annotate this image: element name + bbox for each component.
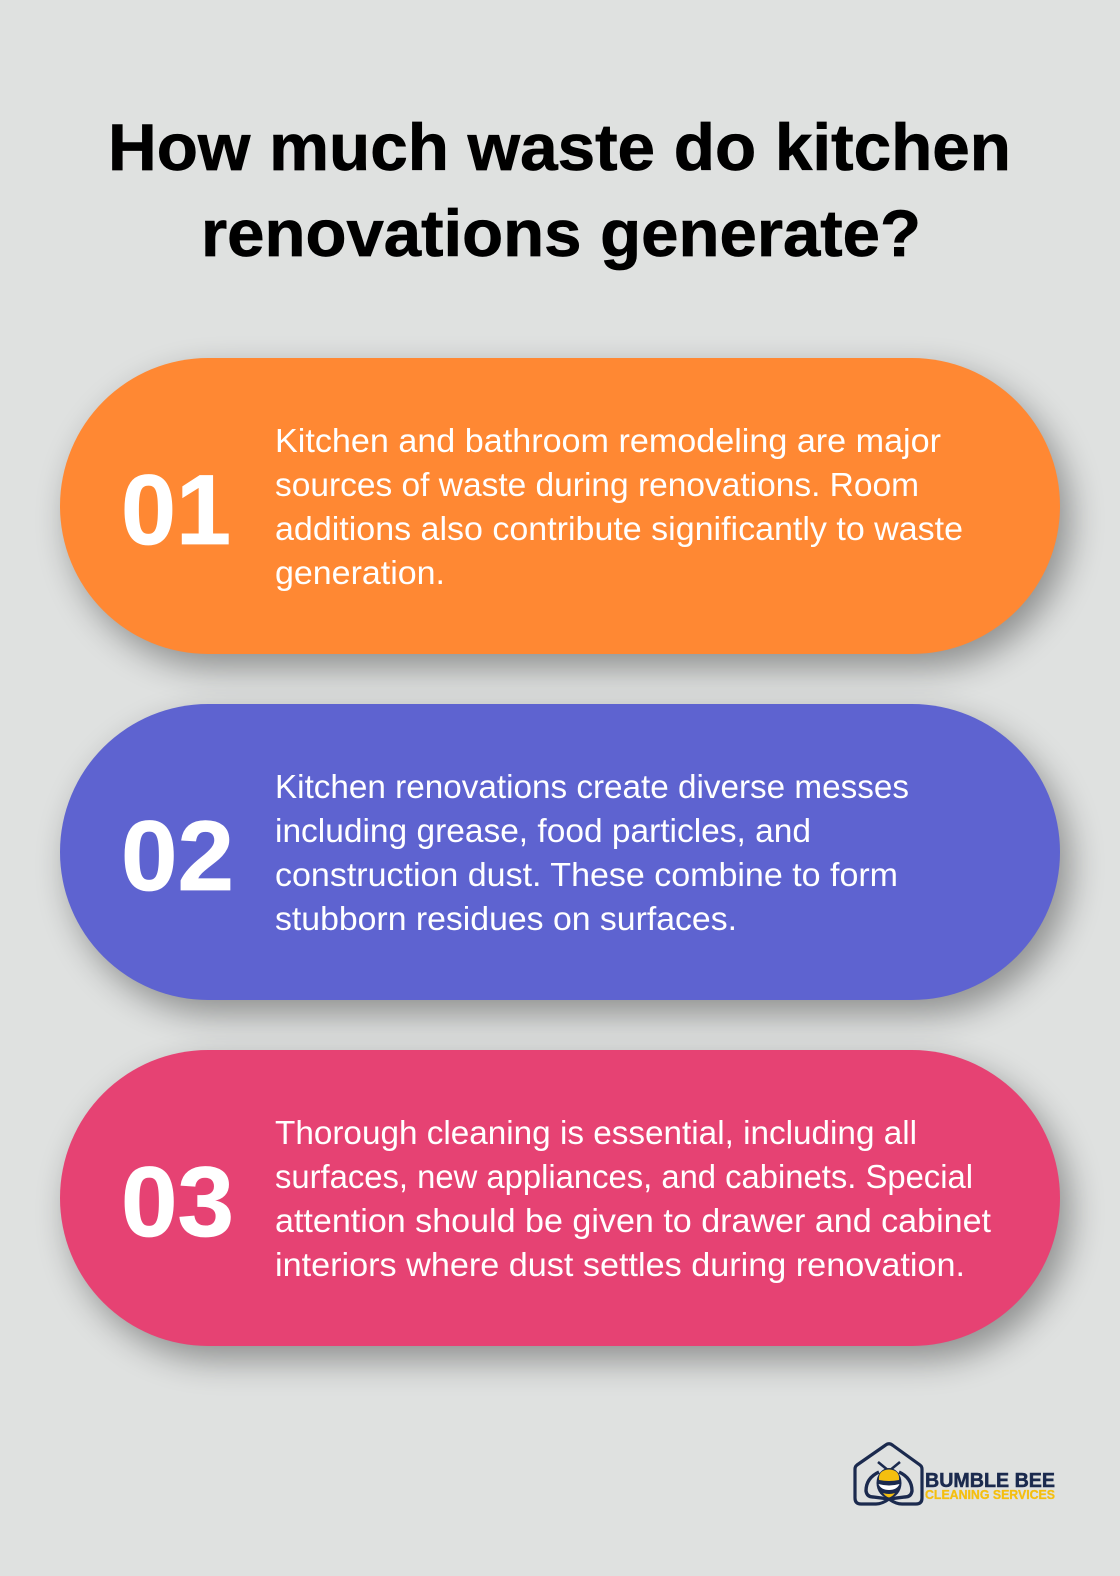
logo wordmark	[925, 1470, 1055, 1502]
number 03: 03	[121, 1146, 234, 1257]
text block 01: Kitchen and bathroom remodeling are major	[275, 422, 941, 459]
text block 01: sources of waste during renovations. Room	[275, 466, 919, 503]
title: How much waste do kitchen	[108, 110, 1011, 184]
pill background orange	[60, 358, 1060, 654]
panel: step 01	[60, 358, 1070, 668]
logo wordmark: CLEANING SERVICES	[925, 1488, 1055, 1502]
icon: house with bee	[855, 1444, 922, 1504]
title: renovations generate?	[201, 196, 921, 270]
text block 02	[275, 768, 909, 937]
pill background pink	[60, 1050, 1060, 1346]
text block 02: construction dust. These combine to form	[275, 856, 898, 893]
logo: Bumble Bee Cleaning Services	[855, 1444, 1055, 1504]
text block 02: including grease, food particles, and	[275, 812, 811, 849]
text block 03: surfaces, new appliances, and cabinets. Special	[275, 1158, 973, 1195]
title	[108, 110, 1011, 270]
text block 03	[275, 1114, 991, 1283]
panel: step 03	[60, 1050, 1070, 1360]
number 01: 01	[121, 454, 231, 565]
text block 03: attention should be given to drawer and cabinet	[275, 1202, 991, 1239]
logo wordmark: BUMBLE BEE	[925, 1470, 1055, 1492]
text block 03: Thorough cleaning is essential, including all	[275, 1114, 917, 1151]
number 02: 02	[121, 800, 234, 911]
text block 03: interiors where dust settles during renovation.	[275, 1246, 965, 1283]
text block 02: stubborn residues on surfaces.	[275, 900, 737, 937]
text block 01: additions also contribute significantly to waste	[275, 510, 963, 547]
panel: step 02	[60, 704, 1070, 1014]
pill background blue	[60, 704, 1060, 1000]
text block 01	[275, 422, 963, 591]
text block 02: Kitchen renovations create diverse messes	[275, 768, 909, 805]
text block 01: generation.	[275, 554, 445, 591]
